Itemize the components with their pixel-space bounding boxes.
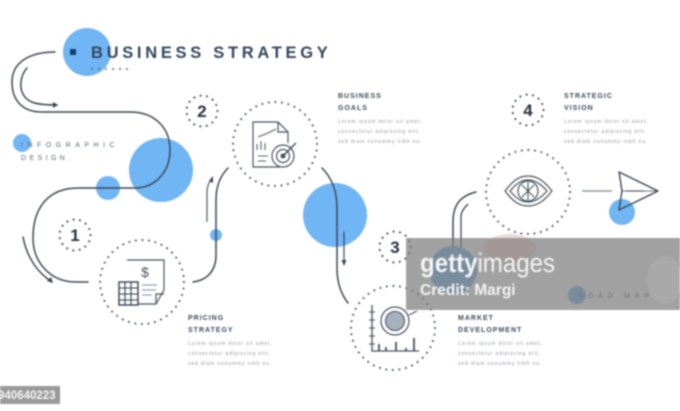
background blue circles xyxy=(13,28,635,247)
watermark banner: gettyimages xyxy=(420,248,555,278)
text block: business goals: sed diam nonummy nibh eu. xyxy=(338,139,422,145)
text block: business goals: BUSINESS xyxy=(338,93,382,100)
text block: market development: Lorem ipsum dolor sit amet, xyxy=(458,341,543,347)
step 3 number xyxy=(380,232,410,262)
connector path: pricing to goals xyxy=(193,168,228,282)
icon: pricing calculator and invoice xyxy=(100,240,184,324)
text block: pricing strategy: STRATEGY xyxy=(188,327,234,334)
step 2 number: 2 xyxy=(197,102,207,121)
step 1 number: 1 xyxy=(70,226,80,245)
icon: paper plane with dashed trail xyxy=(582,172,658,210)
icon: market development chart xyxy=(351,286,435,370)
step 4 number xyxy=(512,94,544,126)
text block: strategic vision: consectetur adipiscing elit, xyxy=(564,129,646,135)
title: BUSINESS STRATEGY xyxy=(91,44,331,62)
text block: strategic vision: Lorem ipsum dolor sit amet, xyxy=(564,119,649,125)
arrow: top inner curve xyxy=(21,68,58,108)
step 3 number: 3 xyxy=(390,238,400,257)
text block: pricing strategy: Lorem ipsum dolor sit amet, xyxy=(188,341,273,347)
text block: strategic vision: sed diam nonummy nibh eu. xyxy=(564,139,648,145)
text block: pricing strategy: sed diam nonummy nibh eu. xyxy=(188,361,272,367)
subtitle: infographic design xyxy=(21,142,119,162)
connector path: market to vision xyxy=(453,192,476,275)
text block: market development xyxy=(458,315,543,367)
text block: market development: MARKET xyxy=(458,315,494,322)
text block: business goals: GOALS xyxy=(338,105,368,112)
text block: market development: sed diam nonummy nibh eu. xyxy=(458,361,542,367)
text block: business goals xyxy=(338,93,423,145)
icon: pricing calculator and invoice: $ xyxy=(141,264,149,280)
text block: business goals: consectetur adipiscing elit, xyxy=(338,129,420,135)
text block: pricing strategy: PRICING xyxy=(188,315,224,322)
step 1 number xyxy=(60,220,90,250)
watermark banner xyxy=(406,234,680,310)
image id stamp xyxy=(0,386,60,404)
subtitle: infographic design: INFOGRAPHIC xyxy=(21,142,119,149)
text block: market development: consectetur adipiscing elit, xyxy=(458,351,540,357)
icon: strategic vision eye xyxy=(486,150,570,234)
step 2 number xyxy=(186,96,218,126)
blue circle under watermark xyxy=(429,246,477,294)
road map label xyxy=(568,286,654,304)
connector path: title to pricing xyxy=(12,52,170,282)
title xyxy=(70,44,331,69)
icon: business goals report and target xyxy=(233,102,317,186)
connector path: goals to market xyxy=(322,168,348,303)
step 4 number: 4 xyxy=(523,101,533,120)
arrow: bottom left curve xyxy=(23,237,53,283)
text block: market development: DEVELOPMENT xyxy=(458,327,522,334)
text block: strategic vision: VISION xyxy=(564,105,594,112)
watermark banner: Credit: Margi xyxy=(420,282,516,299)
text block: pricing strategy: consectetur adipiscing elit, xyxy=(188,351,270,357)
text block: strategic vision xyxy=(564,93,649,145)
subtitle: infographic design: DESIGN. xyxy=(21,155,74,162)
road map label: ROAD MAP xyxy=(578,293,654,300)
text block: pricing strategy xyxy=(188,315,273,367)
text block: strategic vision: STRATEGIC xyxy=(564,93,613,100)
text block: business goals: Lorem ipsum dolor sit amet, xyxy=(338,119,423,125)
